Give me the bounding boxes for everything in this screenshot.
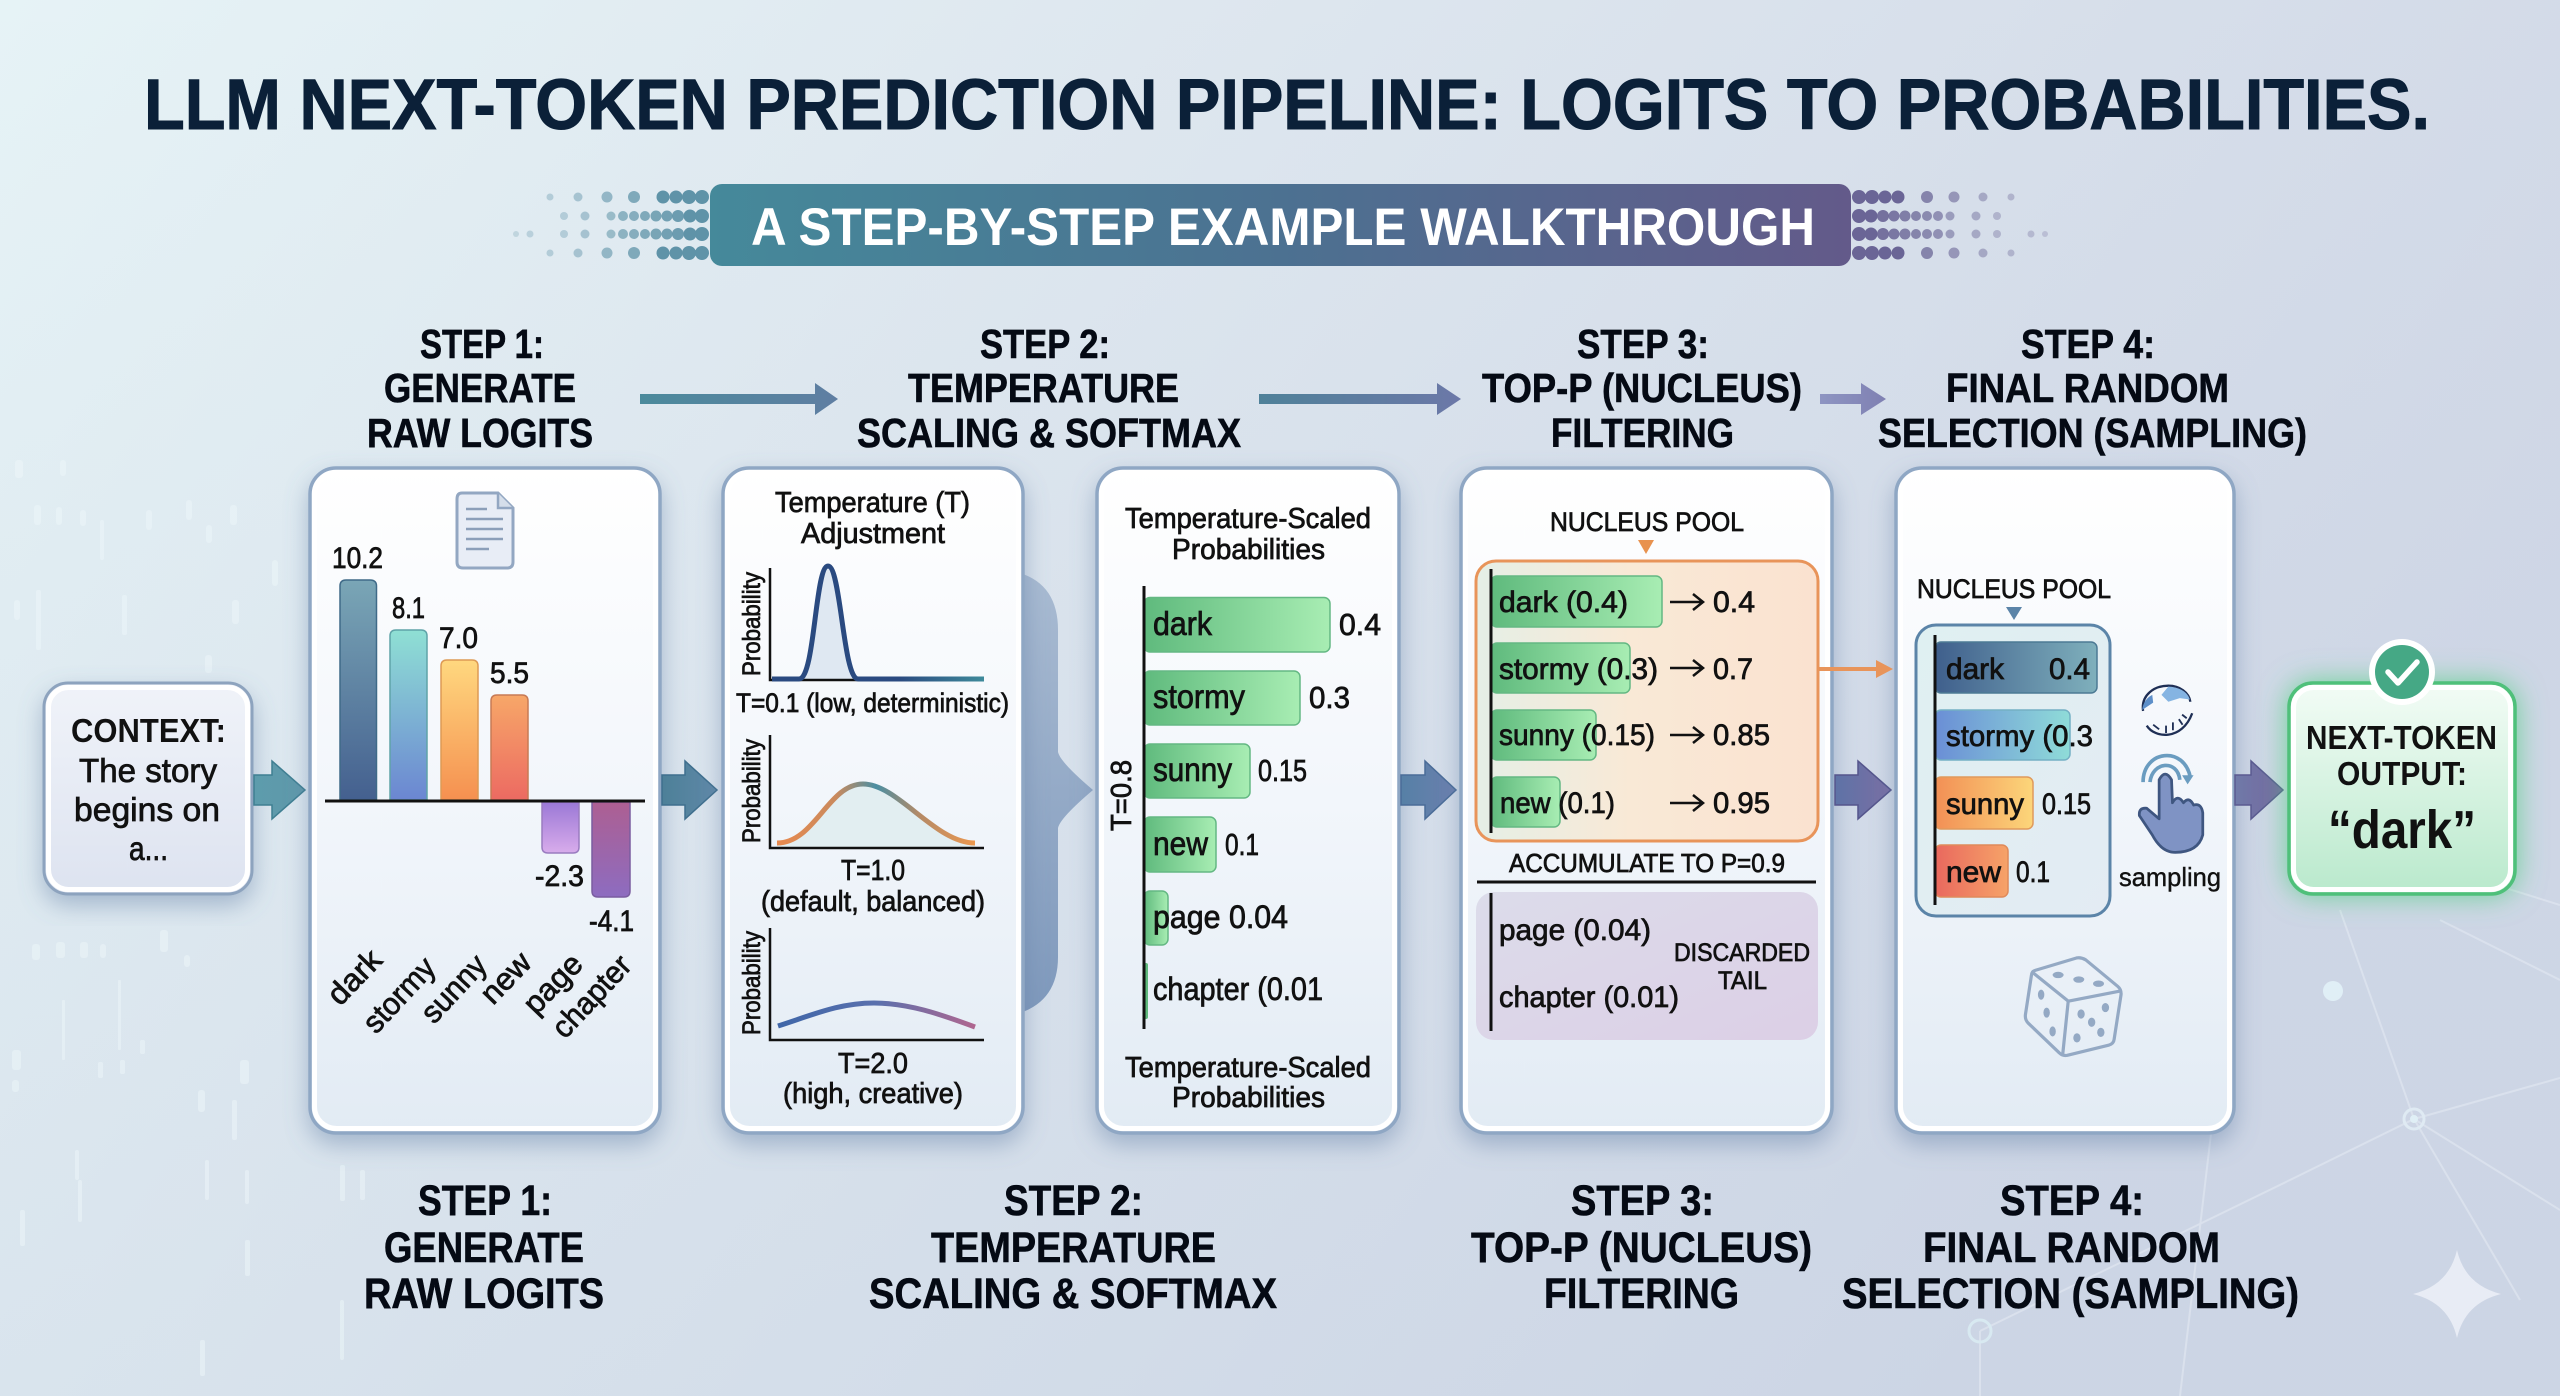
nucleus pool box: 0.4 <box>2049 653 2090 686</box>
arrow: step 2 to step 3 <box>1401 761 1456 819</box>
panel: step 3 top-p filtering <box>1461 468 1832 1133</box>
bottom heading: step 4: SELECTION (SAMPLING) <box>1842 1270 2299 1318</box>
nucleus pool box: sunny <box>1946 788 2024 821</box>
bar chart: raw logits: sunny <box>414 947 494 1030</box>
subtitle banner: A STEP-BY-STEP EXAMPLE WALKTHROUGH <box>751 198 1815 257</box>
panel heading <box>1125 503 1371 566</box>
decorative binary rain on the left <box>12 460 365 1376</box>
nucleus pool box: 0.85 <box>1713 719 1770 752</box>
bottom heading: step 4: FINAL RANDOM <box>1923 1224 2220 1272</box>
chart: T=2.0: (high, creative) <box>783 1078 963 1110</box>
bar chart: raw logits: dark <box>320 942 389 1012</box>
nucleus pool box: stormy (0.3) <box>1499 653 1658 686</box>
panel: next-token output: “dark” <box>2328 800 2476 860</box>
bottom heading: step 3 <box>1471 1177 1812 1318</box>
panel heading: Probabilities <box>1172 534 1325 566</box>
nucleus pool box: 0.1 <box>2016 856 2050 889</box>
discarded tail box: page (0.04) <box>1499 914 1651 947</box>
bar chart: raw logits: -4.1 <box>589 905 634 938</box>
bar chart: scaled probabilities <box>1106 586 1381 1029</box>
nucleus pool label: NUCLEUS POOL <box>1550 507 1744 537</box>
bar chart: raw logits <box>320 542 645 1045</box>
panel: context input: The story <box>79 752 217 789</box>
nucleus pool box: new (0.1) <box>1500 787 1615 820</box>
top heading: step 1: STEP 1: <box>420 321 544 367</box>
chart: T=1.0 <box>738 735 985 918</box>
arrow: step 3 to step 4 <box>1835 761 1891 819</box>
chart: T=1.0: T=1.0 <box>841 855 905 887</box>
nucleus pool box: 0.15 <box>2042 788 2091 821</box>
chart: T=2.0 <box>738 928 984 1110</box>
top heading: step 3: FILTERING <box>1551 410 1734 456</box>
panel: step 4 final random selection <box>1896 468 2234 1133</box>
bar chart: raw logits: 5.5 <box>490 657 529 690</box>
chart: T=0.1: Probability <box>738 572 766 676</box>
nucleus pool box: 0.7 <box>1713 653 1753 686</box>
bar chart: scaled probabilities: stormy <box>1153 678 1245 715</box>
decorative network lines on the right <box>1980 880 2560 1396</box>
title: LLM NEXT-TOKEN PREDICTION PIPELINE: LOGITS TO PROBABILITIES. <box>144 66 2430 145</box>
bar chart: scaled probabilities: 0.1 <box>1225 827 1259 862</box>
bar chart: raw logits: page <box>516 946 590 1021</box>
top heading: step 1: GENERATE <box>384 365 576 411</box>
bottom heading: step 1: GENERATE <box>384 1224 584 1272</box>
bottom heading: step 1: RAW LOGITS <box>364 1270 604 1318</box>
panel: context input: CONTEXT: <box>71 712 226 749</box>
chart: T=2.0: Probability <box>738 931 766 1035</box>
bar chart: raw logits: 7.0 <box>439 622 478 655</box>
icon: dice <box>2025 958 2121 1056</box>
panel heading: Temperature-Scaled <box>1125 503 1371 535</box>
arrow: nucleus pool to selection <box>1818 660 1893 678</box>
arrow: step 4 to output <box>2235 761 2283 819</box>
bottom heading: step 2 <box>869 1177 1277 1318</box>
panel heading: Temperature (T) <box>775 487 970 519</box>
nucleus pool box <box>1476 561 1818 841</box>
bar chart: scaled probabilities: 0.15 <box>1258 753 1307 788</box>
subtitle banner <box>513 184 2048 266</box>
nucleus pool label <box>1917 574 2111 620</box>
top heading: step 2: TEMPERATURE <box>908 365 1179 411</box>
top heading: step 4: SELECTION (SAMPLING) <box>1878 410 2307 456</box>
nucleus pool box: sunny (0.15) <box>1499 719 1655 752</box>
panel footer: Temperature-Scaled <box>1125 1052 1371 1084</box>
panel footer <box>1125 1052 1371 1114</box>
top heading: step 4: STEP 4: <box>2021 321 2155 367</box>
bottom heading: step 1 <box>364 1177 604 1318</box>
bar chart: raw logits: chapter <box>545 948 638 1045</box>
top heading: step 1 <box>367 321 593 456</box>
panel: next-token output: NEXT-TOKEN <box>2306 719 2497 756</box>
top heading: step 4 <box>1878 321 2307 456</box>
discarded tail box: TAIL <box>1718 967 1767 995</box>
panel: step 2 temperature-scaled probabilities <box>1097 468 1399 1133</box>
icon: check badge <box>2369 639 2435 705</box>
chart: T=0.1: T=0.1 (low, deterministic) <box>736 688 1009 718</box>
panel: step 2 temperature adjustment <box>723 468 1023 1133</box>
nucleus pool box: 0.4 <box>1713 586 1755 619</box>
top heading: step 1: RAW LOGITS <box>367 410 593 456</box>
discarded tail box <box>1476 882 1818 1040</box>
top heading: step 3: STEP 3: <box>1577 321 1709 367</box>
bottom heading: step 2: TEMPERATURE <box>931 1224 1216 1272</box>
brace connector between temperature panels <box>1020 573 1093 1013</box>
discarded tail box: DISCARDED <box>1674 939 1810 967</box>
top heading: step 2: STEP 2: <box>980 321 1110 367</box>
nucleus pool box: 0.95 <box>1713 787 1770 820</box>
nucleus pool box: dark <box>1946 653 2005 686</box>
nucleus pool box: new <box>1946 856 2001 889</box>
panel: next-token output: OUTPUT: <box>2337 755 2467 792</box>
accumulate label: ACCUMULATE TO P=0.9 <box>1509 848 1785 878</box>
arrow: step 1 to step 2 heading <box>640 383 838 415</box>
panel heading: Adjustment <box>801 518 945 550</box>
chart: T=2.0: T=2.0 <box>838 1048 908 1080</box>
sparkle <box>2413 1250 2501 1338</box>
bar chart: scaled probabilities: sunny <box>1153 751 1232 788</box>
panel: step 1 raw logits <box>310 468 660 1133</box>
nucleus pool label: NUCLEUS POOL <box>1917 574 2111 604</box>
bar chart: raw logits: stormy <box>356 950 443 1040</box>
bottom heading: step 1: STEP 1: <box>418 1177 552 1225</box>
nucleus pool box: stormy (0.3 <box>1946 720 2093 753</box>
top heading: step 3 <box>1482 321 1802 456</box>
bottom heading: step 3: FILTERING <box>1544 1270 1739 1318</box>
icon: sampling dial <box>2142 686 2192 735</box>
nucleus pool label <box>1550 507 1744 554</box>
panel: context input <box>44 683 252 894</box>
arrow: step 1 to step 2 <box>662 761 717 819</box>
chart: T=1.0: (default, balanced) <box>761 886 985 918</box>
nucleus pool box <box>1916 625 2110 916</box>
panel: next-token output <box>2289 639 2515 894</box>
bar chart: scaled probabilities: page 0.04 <box>1153 899 1288 935</box>
discarded tail box: chapter (0.01) <box>1499 981 1679 1014</box>
decorative network nodes <box>1969 981 2424 1342</box>
icon: tapping hand <box>2139 756 2203 852</box>
top heading: step 2 <box>857 321 1241 456</box>
bottom heading: step 3: TOP-P (NUCLEUS) <box>1471 1224 1812 1272</box>
bar chart: scaled probabilities: chapter (0.01 <box>1153 971 1323 1007</box>
bottom heading: step 2: STEP 2: <box>1004 1177 1143 1225</box>
arrow: step 2 to step 3 heading <box>1259 383 1461 415</box>
top heading: step 2: SCALING & SOFTMAX <box>857 410 1241 456</box>
sampling label: sampling <box>2119 862 2221 892</box>
bar chart: raw logits: -2.3 <box>535 860 584 893</box>
chart: T=1.0: Probability <box>738 739 766 843</box>
bottom heading: step 2: SCALING & SOFTMAX <box>869 1270 1277 1318</box>
bar chart: scaled probabilities: 0.3 <box>1309 680 1350 715</box>
panel heading <box>775 487 970 550</box>
bottom heading: step 3: STEP 3: <box>1571 1177 1714 1225</box>
bar chart: scaled probabilities: T=0.8 <box>1106 760 1138 831</box>
icon: document <box>457 493 513 568</box>
panel: context input: begins on <box>74 791 220 828</box>
chart: T=0.1 <box>736 566 1009 718</box>
bar chart: raw logits: 8.1 <box>392 592 425 625</box>
panel: context input: a... <box>129 830 168 867</box>
top heading: step 3: TOP-P (NUCLEUS) <box>1482 365 1802 411</box>
arrow: step 3 to step 4 heading <box>1820 383 1886 415</box>
arrow: context to step 1 <box>254 761 305 819</box>
bar chart: scaled probabilities: new <box>1153 825 1208 862</box>
panel footer: Probabilities <box>1172 1082 1325 1114</box>
bar chart: raw logits: 10.2 <box>332 542 383 575</box>
bottom heading: step 4 <box>1842 1177 2299 1318</box>
top heading: step 4: FINAL RANDOM <box>1946 365 2229 411</box>
bar chart: scaled probabilities: dark <box>1153 605 1212 642</box>
bar chart: raw logits: new <box>473 944 539 1011</box>
nucleus pool box: dark (0.4) <box>1499 586 1628 619</box>
bar chart: scaled probabilities: 0.4 <box>1339 607 1381 642</box>
bottom heading: step 4: STEP 4: <box>2000 1177 2144 1225</box>
